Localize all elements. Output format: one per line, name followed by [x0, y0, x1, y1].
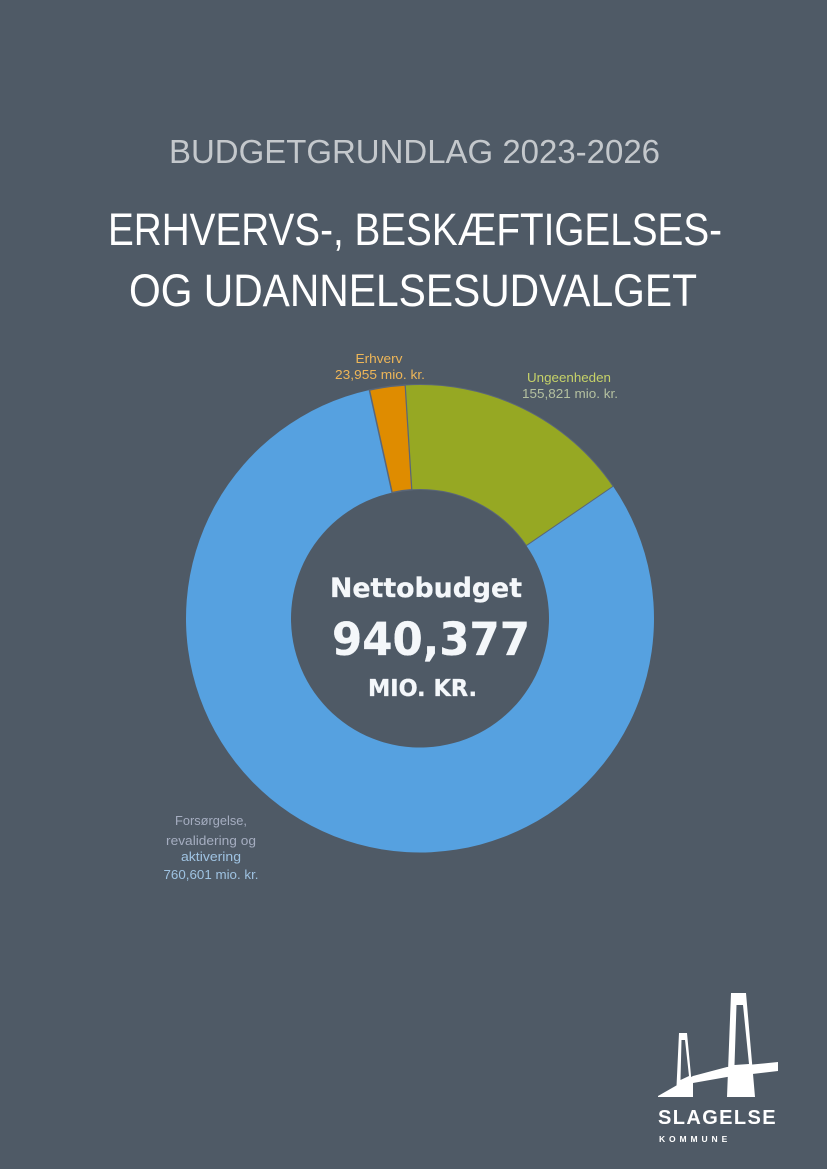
center label: net budget: 940,377	[332, 613, 530, 666]
label: Forsørgelse, revalidering og aktivering: aktivering	[181, 849, 241, 864]
logo: Slagelse Kommune	[658, 993, 778, 1144]
segment: Forsørgelse, revalidering og aktivering	[186, 390, 654, 852]
label: Erhverv	[335, 351, 425, 382]
label: Ungeenheden	[522, 370, 618, 401]
logo: Slagelse Kommune: KOMMUNE	[659, 1134, 731, 1144]
label: Forsørgelse, revalidering og aktivering: 760,601 mio. kr.	[164, 867, 258, 882]
label: Forsørgelse, revalidering og aktivering: Forsørgelse,	[175, 813, 247, 828]
subtitle: BUDGETGRUNDLAG 2023-2026	[169, 133, 660, 170]
wordmark: SLAGELSE	[658, 1107, 777, 1129]
label: Ungeenheden: 155,821 mio. kr.	[522, 386, 618, 401]
title: OG UDANNELSESUDVALGET	[129, 265, 697, 316]
segment: Ungeenheden	[405, 385, 613, 546]
icon: bridge	[658, 993, 778, 1097]
title	[108, 204, 722, 316]
donut chart	[186, 385, 654, 852]
center label: net budget	[330, 573, 530, 702]
segment: Erhverv	[369, 385, 412, 493]
label: Erhverv: Erhverv	[356, 351, 403, 366]
label: Ungeenheden: Ungeenheden	[527, 370, 611, 385]
label: Erhverv: 23,955 mio. kr.	[335, 367, 425, 382]
center label: net budget: Nettobudget	[330, 573, 522, 604]
title: ERHVERVS-, BESKÆFTIGELSES-	[108, 204, 722, 255]
label: Forsørgelse, revalidering og aktivering: revalidering og	[166, 833, 256, 848]
center label: net budget: MIO. KR.	[368, 676, 477, 702]
label: Forsørgelse, revalidering og aktivering	[164, 813, 258, 882]
